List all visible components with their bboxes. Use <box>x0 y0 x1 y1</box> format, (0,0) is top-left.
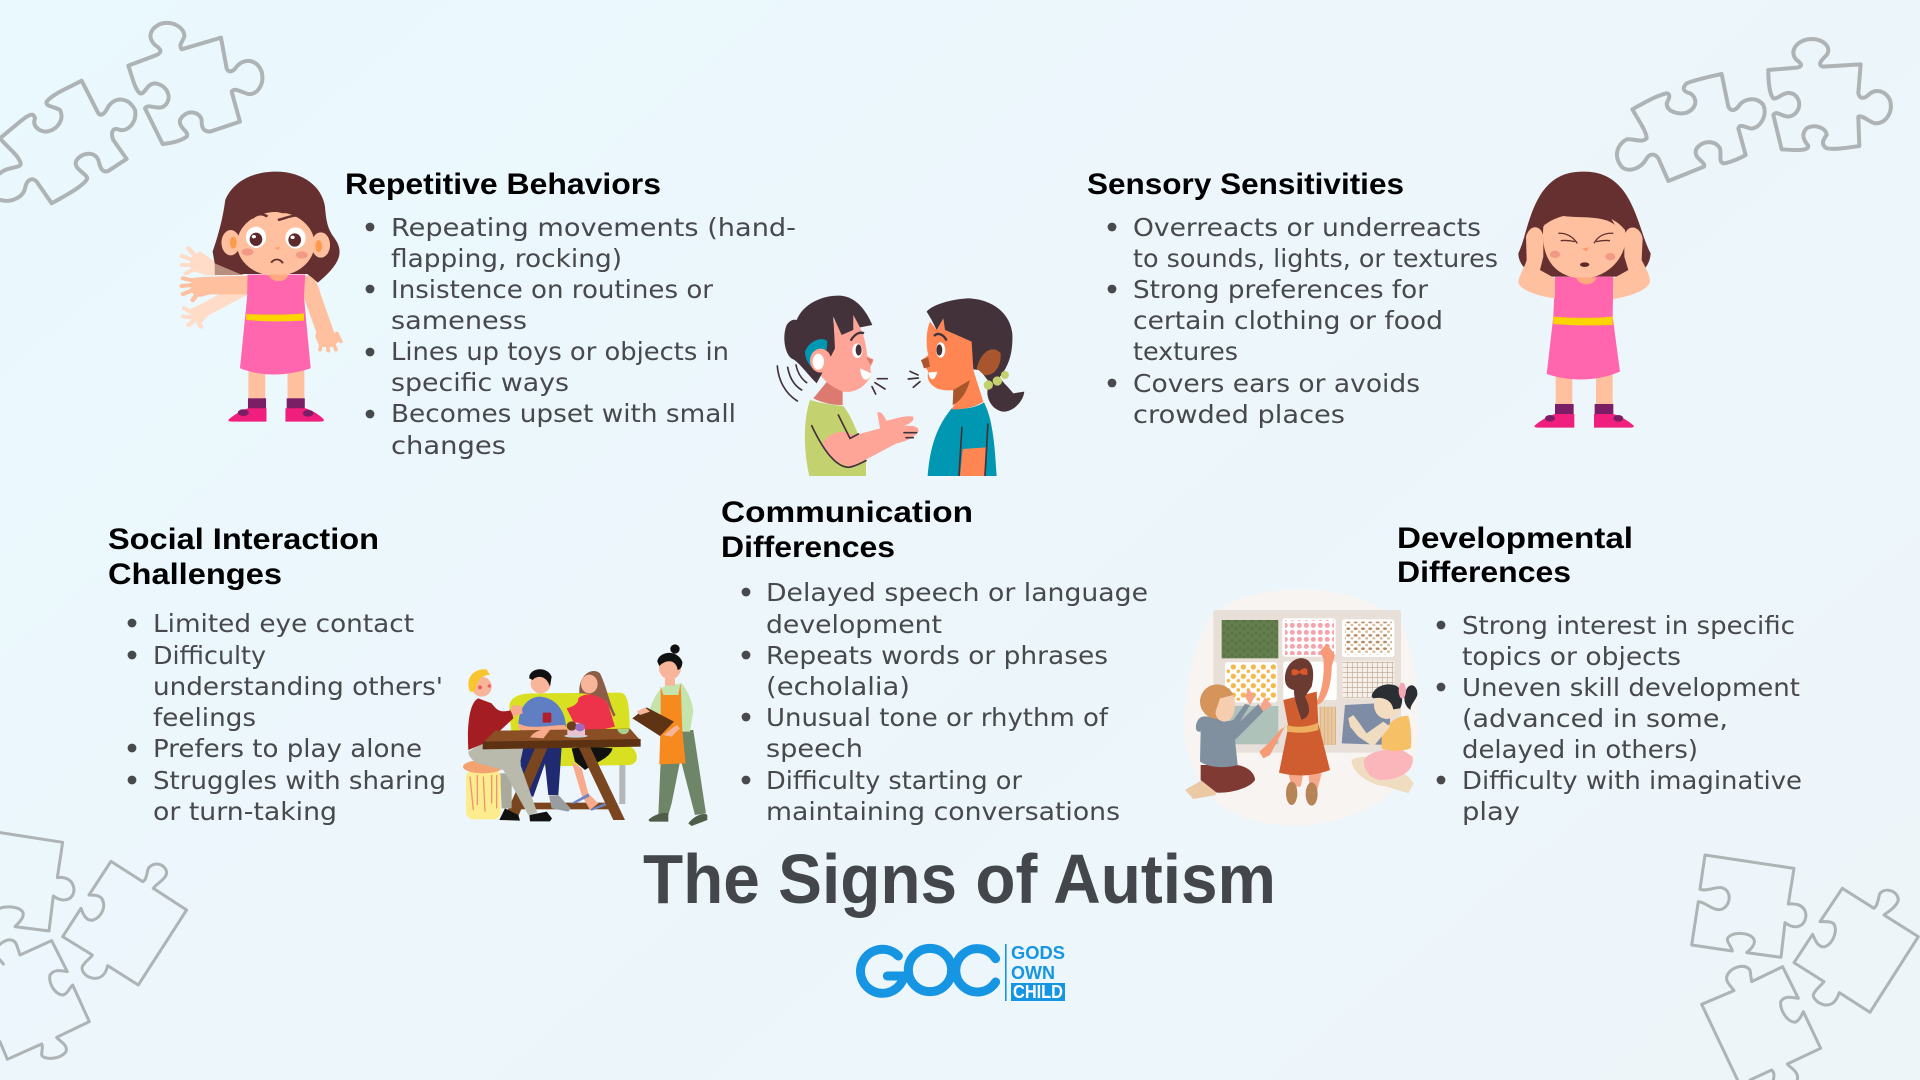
bullet list: Difficulty with imaginative <box>1462 766 1802 795</box>
bullet list <box>1437 611 1802 826</box>
panel: developmental differences <box>1397 522 1802 826</box>
heading: Repetitive Behaviors <box>345 168 661 201</box>
logo mark <box>861 948 996 993</box>
bullet list: Repeating movements (hand- <box>391 213 796 242</box>
bullet list: speech <box>766 734 863 763</box>
bullet list: certain clothing or food <box>1133 306 1443 335</box>
heading: Sensory Sensitivities <box>1087 168 1404 201</box>
panel: repetitive behaviors <box>345 168 796 460</box>
bullet list: changes <box>391 431 506 460</box>
illustration: two children talking <box>777 296 1024 476</box>
bullet list: Struggles with sharing <box>153 766 446 795</box>
bullet list <box>366 213 796 460</box>
logo: GOC Gods Own Child <box>861 943 1065 1002</box>
bullet list: Prefers to play alone <box>153 734 422 763</box>
panel: social interaction challenges <box>108 523 446 826</box>
bullet list: Becomes upset with small <box>391 399 736 428</box>
bullet list: Overreacts or underreacts <box>1133 213 1481 242</box>
illustration: children at sensory wall <box>1183 590 1419 825</box>
panel: communication differences <box>721 496 1148 826</box>
bullet list: sameness <box>391 306 527 335</box>
bullet list: Repeats words or phrases <box>766 641 1108 670</box>
puzzle pieces: top left <box>0 23 262 203</box>
bullet list: Strong preferences for <box>1133 275 1429 304</box>
bullet list: Limited eye contact <box>153 609 414 638</box>
bullet list: topics or objects <box>1462 642 1681 671</box>
logo wordmark: GODS <box>1011 943 1065 963</box>
bullet list: flapping, rocking) <box>391 244 622 273</box>
illustration: girl flapping hands <box>182 172 341 422</box>
heading: Communication <box>721 496 973 529</box>
panel: sensory sensitivities <box>1087 168 1498 429</box>
bullet list: understanding others' <box>153 672 443 701</box>
bullet list: Insistence on routines or <box>391 275 714 304</box>
bullet list: Covers ears or avoids <box>1133 369 1420 398</box>
heading: Developmental <box>1397 522 1633 555</box>
illustration: girl covering ears <box>1518 172 1651 428</box>
bullet list: Unusual tone or rhythm of <box>766 703 1109 732</box>
bullet list: play <box>1462 797 1520 826</box>
bullet list: maintaining conversations <box>766 797 1120 826</box>
logo wordmark: CHILD <box>1013 982 1063 1002</box>
heading: Social Interaction <box>108 523 379 556</box>
bullet list: to sounds, lights, or textures <box>1133 244 1498 273</box>
bullet list: or turn-taking <box>153 797 337 826</box>
bullet list: Difficulty <box>153 641 266 670</box>
bullet list: crowded places <box>1133 400 1345 429</box>
bullet list <box>742 578 1148 826</box>
bullet list: development <box>766 610 942 639</box>
panel: social interaction challenges: Challenges <box>108 558 282 591</box>
bullet list: textures <box>1133 337 1238 366</box>
bullet list: (echolalia) <box>766 672 910 701</box>
bullet list <box>1108 213 1498 429</box>
logo wordmark: OWN <box>1011 963 1055 983</box>
bullet list: Uneven skill development <box>1462 673 1800 702</box>
bullet list: delayed in others) <box>1462 735 1698 764</box>
bullet list <box>128 609 446 826</box>
puzzle pieces: top right <box>1617 39 1891 181</box>
bullet list: Lines up toys or objects in <box>391 337 729 366</box>
panel: communication differences: Differences <box>721 531 895 564</box>
puzzle pieces: bottom right <box>1692 855 1918 1080</box>
illustration: friends at cafe table <box>463 644 707 826</box>
bullet list: Strong interest in specific <box>1462 611 1795 640</box>
bullet list: specific ways <box>391 368 569 397</box>
bullet list: Difficulty starting or <box>766 766 1023 795</box>
bullet list: (advanced in some, <box>1462 704 1728 733</box>
puzzle pieces: bottom left <box>0 833 187 1059</box>
title: The Signs of Autism <box>643 840 1276 918</box>
logo wordmark <box>1005 943 1065 1002</box>
bullet list: Delayed speech or language <box>766 578 1148 607</box>
bullet list: feelings <box>153 703 256 732</box>
panel: developmental differences: Differences <box>1397 556 1571 589</box>
